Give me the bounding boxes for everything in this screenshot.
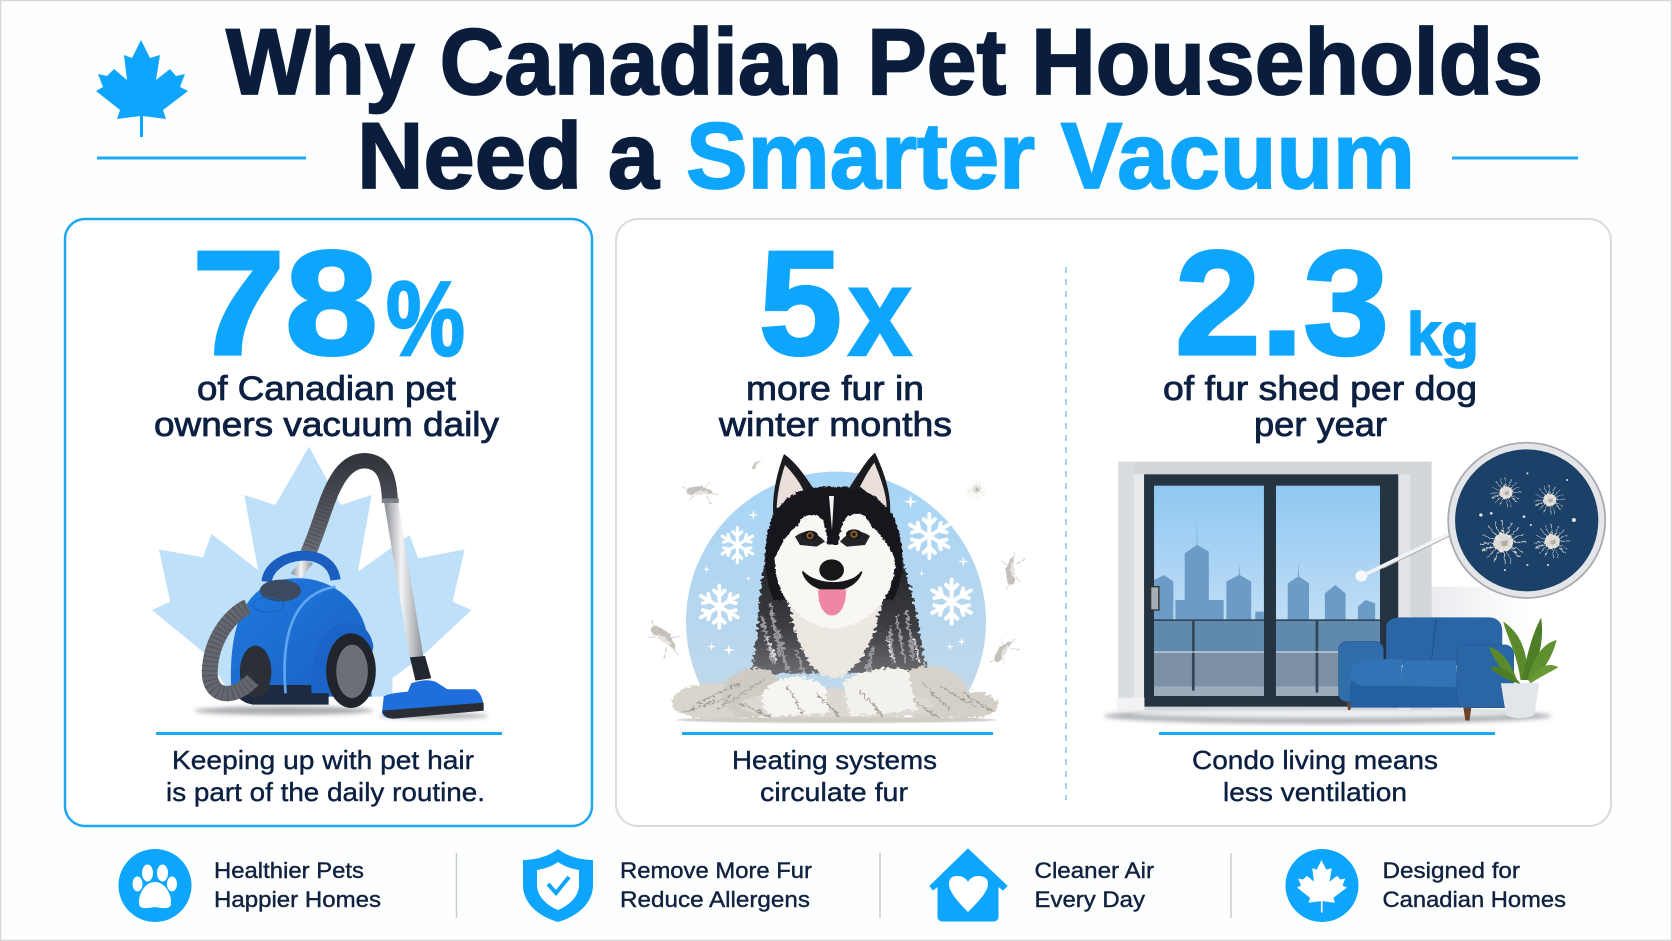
panel: 78 percent daily vacuuming [65, 219, 592, 826]
stat: 2.3 kg: 2.3 [1175, 221, 1389, 386]
stat description: of Canadian pet [197, 370, 457, 408]
caption: is part of the daily routine. [166, 777, 485, 807]
benefit: designed for Canadian homes: Canadian Homes [1382, 887, 1566, 912]
icon: maple leaf [96, 40, 188, 137]
stat description: per dog: of fur shed per dog [1163, 370, 1477, 408]
illustration: vacuum on maple leaf [152, 447, 489, 719]
benefit: healthier pets: Happier Homes [214, 887, 381, 912]
caption [166, 745, 485, 807]
benefit: healthier pets [118, 849, 381, 922]
stat description: winter [718, 370, 952, 444]
stat: 78% [192, 221, 465, 386]
caption: heating: Heating systems [732, 745, 937, 775]
stat: 78%: % [386, 260, 465, 378]
title: Need a [357, 103, 660, 208]
caption: condo [1192, 745, 1438, 807]
icon: paw [118, 849, 192, 922]
icon: shield [523, 849, 593, 922]
benefit: cleaner air: Every Day [1034, 887, 1145, 912]
stat: 5x: x [848, 243, 912, 382]
caption: Keeping up with pet hair [172, 745, 474, 775]
stat description [154, 370, 499, 444]
icon: house with heart [930, 849, 1007, 921]
title: Why Canadian Pet Households [226, 9, 1543, 114]
illustration: husky with shed fur [642, 453, 1031, 783]
stat: 5x [759, 221, 912, 386]
stat description: per dog: per year [1254, 406, 1387, 444]
title: Smarter Vacuum [686, 103, 1415, 208]
benefit: designed for Canadian homes [1286, 849, 1566, 922]
caption: condo: Condo living means [1192, 745, 1438, 775]
illustration: condo window, sofa and dust magnifier [1104, 443, 1605, 724]
benefit: healthier pets: Healthier Pets [214, 858, 364, 883]
icon: maple leaf badge [1286, 849, 1358, 922]
stat: 2.3 kg: kg [1407, 301, 1479, 368]
stat: 2.3 kg [1175, 221, 1479, 386]
caption: condo: less ventilation [1223, 777, 1407, 807]
stat: 78%: 78 [192, 221, 378, 386]
footer benefits strip [118, 849, 1566, 922]
benefit: remove more fur [523, 849, 812, 922]
stat description: per dog [1163, 370, 1477, 444]
benefit: cleaner air: Cleaner Air [1034, 858, 1154, 883]
benefit: remove more fur: Remove More Fur [620, 858, 812, 883]
stat description: owners vacuum daily [154, 406, 499, 444]
benefit: remove more fur: Reduce Allergens [620, 887, 810, 912]
stat: 5x: 5 [759, 221, 842, 386]
stat description: winter: more fur in [746, 370, 924, 408]
benefit: designed for Canadian homes: Designed for [1382, 858, 1520, 883]
caption: heating: circulate fur [760, 777, 908, 807]
header [96, 9, 1578, 208]
title [226, 9, 1543, 208]
caption: heating [732, 745, 937, 807]
benefit: cleaner air [930, 849, 1154, 921]
stat description: winter: winter months [718, 406, 952, 444]
panel: winter fur and condo living [616, 219, 1611, 826]
